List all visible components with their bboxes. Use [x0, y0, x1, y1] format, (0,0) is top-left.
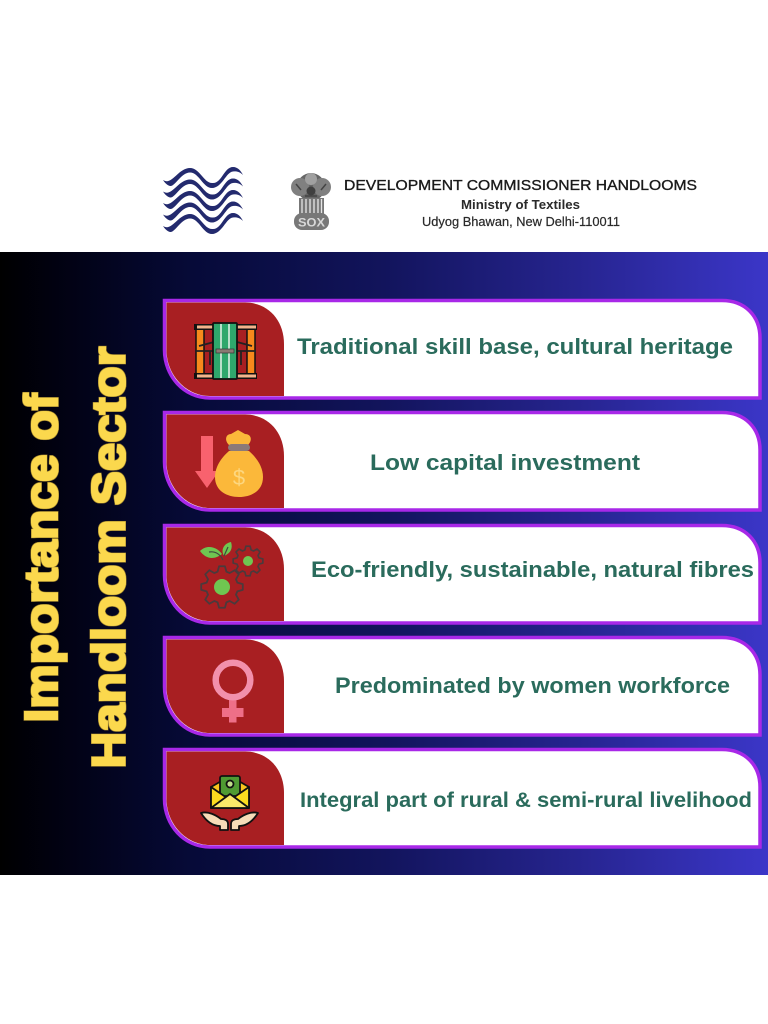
icon: handloom [194, 323, 257, 379]
card background [164, 412, 760, 510]
card background [164, 750, 760, 847]
icon: female symbol [216, 663, 250, 722]
label: Traditional skill base, cultural heritage [297, 334, 733, 359]
panel: rural livelihood [164, 750, 760, 847]
header: organisation logos and address [163, 167, 697, 234]
card background [164, 526, 760, 623]
icon: envelope in hands [201, 776, 258, 830]
red icon tab [166, 528, 284, 621]
icon: gears and leaves [200, 542, 263, 608]
icon: national emblem: SOX [298, 216, 325, 230]
icon: money bag with down arrow: $ [233, 465, 245, 490]
label: Predominated by women workforce [335, 673, 730, 698]
title line 2: Handloom Sector [82, 346, 134, 768]
red icon tab [166, 752, 284, 845]
red icon tab [166, 302, 284, 396]
icon: national emblem [291, 173, 331, 230]
panel: eco-friendly [164, 526, 760, 623]
heading: department name: DEVELOPMENT COMMISSIONER HANDLOOMS [344, 177, 697, 194]
label: Eco-friendly, sustainable, natural fibres [311, 557, 754, 582]
panel: women workforce [164, 638, 760, 735]
label: Low capital investment [370, 450, 641, 475]
card background [164, 638, 760, 735]
panel: gradient banner [0, 252, 768, 875]
title line 1: Importance of [15, 393, 67, 722]
panel: traditional skill [164, 300, 760, 398]
title: Importance of Handloom Sector [15, 346, 134, 768]
text: ministry: Ministry of Textiles [461, 198, 580, 212]
icon: handloom wave logo [163, 167, 243, 234]
icon: money bag with down arrow [195, 430, 263, 497]
red icon tab [166, 640, 284, 733]
text: address: Udyog Bhawan, New Delhi-110011 [422, 215, 620, 229]
card background [164, 300, 760, 398]
label: Integral part of rural & semi-rural livelihood [300, 789, 752, 812]
red icon tab [166, 414, 284, 508]
panel: low capital [164, 412, 760, 510]
